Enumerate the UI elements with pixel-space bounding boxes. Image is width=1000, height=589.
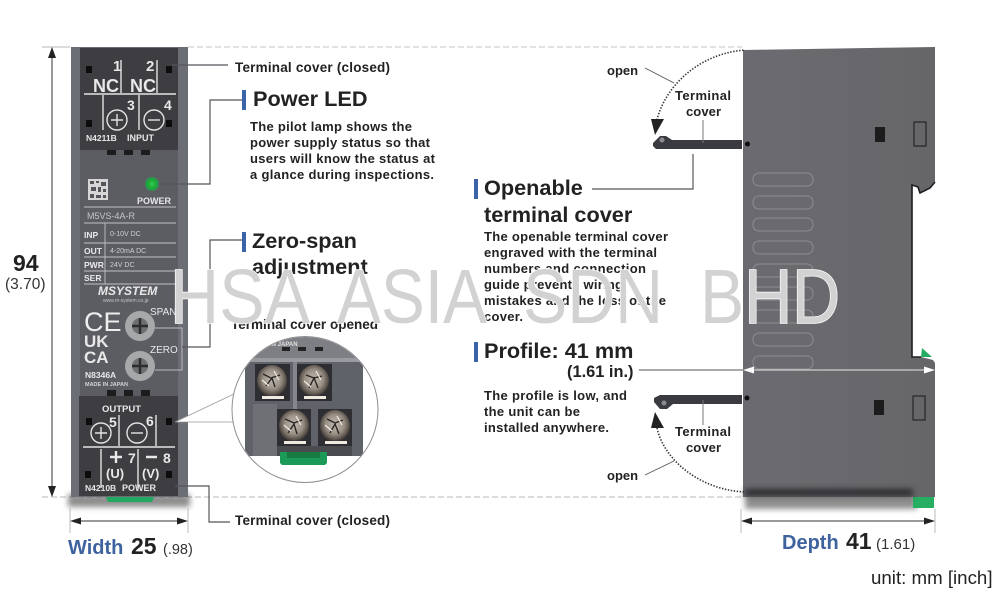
label: terminal cover closed bottom: Terminal cover (closed) <box>235 513 390 528</box>
heading: Profile 41 mm <box>474 338 743 381</box>
heading: Zero-span adjustment: adjustment <box>252 254 368 279</box>
device housing <box>71 47 188 497</box>
lower terminal cover <box>79 390 178 496</box>
heading: Zero-span adjustment <box>242 228 368 279</box>
width label <box>68 533 193 559</box>
text: Power LED description <box>250 119 436 182</box>
watermark: BHD <box>700 254 840 340</box>
depth dimension <box>741 509 935 533</box>
heading: Openable terminal cover <box>474 154 693 227</box>
text: Power LED description: The pilot lamp shows the <box>250 119 412 134</box>
lower terminal cover: POWER <box>122 483 157 493</box>
inset: opened terminals magnifier: IN JAPAN <box>270 342 298 348</box>
nameplate table: OUT <box>84 246 103 256</box>
upper terminal cover: NC <box>93 76 119 96</box>
heading: Openable terminal cover: terminal cover <box>484 202 633 227</box>
model text: MADE IN JAPAN <box>85 382 128 388</box>
span and zero dials: SPAN <box>150 307 176 318</box>
upper terminal cover: 3 <box>127 97 135 113</box>
text: openable cover description: The openable terminal cover <box>484 229 668 244</box>
upper terminal cover: 2 <box>146 58 154 75</box>
text: profile description: The profile is low, and <box>484 388 627 403</box>
nameplate table: SER <box>84 273 101 283</box>
green clip bottom <box>913 494 934 508</box>
lower terminal cover: 8 <box>163 450 171 466</box>
label: open top: open <box>607 63 638 78</box>
CE UKCA marks <box>84 307 122 367</box>
label: terminal cover upper: cover <box>686 104 721 119</box>
shadow under front device <box>68 494 190 507</box>
inset: opened terminals magnifier <box>175 335 385 482</box>
green clip <box>106 497 154 502</box>
upper terminal cover: 1 <box>113 58 121 75</box>
lower terminal cover: 6 <box>146 413 154 429</box>
depth label: 41 <box>846 528 872 554</box>
upper side cover <box>653 136 742 149</box>
label: open bottom <box>607 461 674 483</box>
lower terminal cover: OUTPUT <box>102 404 141 415</box>
lower terminal cover: 7 <box>128 450 136 466</box>
label: terminal cover upper: Terminal <box>675 88 731 103</box>
label: open bottom: open <box>607 468 638 483</box>
nameplate table: PWR <box>84 260 104 270</box>
nameplate table: 24V DC <box>110 262 135 269</box>
lower side cover <box>654 395 742 409</box>
depth label: (1.61) <box>876 536 915 553</box>
QR code <box>88 179 108 200</box>
upper terminal cover: N4211B <box>86 133 117 143</box>
span and zero dials: ZERO <box>150 345 178 356</box>
lower terminal cover: (V) <box>142 466 159 481</box>
power LED <box>145 177 159 191</box>
span and zero dials <box>125 307 182 381</box>
depth arrow on device <box>743 366 935 374</box>
green latch <box>921 348 932 357</box>
label: open top <box>607 63 674 83</box>
heading: Openable terminal cover: Openable <box>484 175 583 200</box>
depth label: Depth <box>782 532 839 554</box>
nameplate table: 4-20mA DC <box>110 248 146 255</box>
text: openable cover description <box>484 229 668 324</box>
upper terminal cover: 4 <box>164 97 172 113</box>
height dimension label: 94 <box>13 250 39 276</box>
lower terminal cover: 5 <box>109 414 117 430</box>
lower terminal cover: (U) <box>106 466 124 481</box>
text: openable cover description: numbers and connection <box>484 261 646 276</box>
text: profile description <box>484 388 627 435</box>
width label: 25 <box>131 533 157 559</box>
MSYSTEM logo <box>98 284 158 304</box>
side housing <box>743 47 935 497</box>
width label: (.98) <box>163 542 193 558</box>
MSYSTEM logo: MSYSTEM <box>98 284 158 298</box>
height dimension label: (3.70) <box>5 276 46 293</box>
watermark <box>170 254 840 340</box>
width dimension <box>70 508 188 533</box>
upper terminal cover <box>80 48 178 155</box>
label: terminal cover closed top: Terminal cover (closed) <box>235 60 390 75</box>
front view device: POWER <box>137 196 172 206</box>
nameplate table: 0-10V DC <box>110 231 141 238</box>
label: terminal cover lower <box>675 400 731 455</box>
callout lines: front view <box>158 65 243 522</box>
label: terminal cover upper <box>675 88 731 143</box>
dashed extension lines <box>42 47 742 497</box>
MSYSTEM logo: www.m-system.co.jp <box>103 298 149 304</box>
nameplate table: M5VS-4A-R <box>87 211 136 221</box>
nameplate table: INP <box>84 230 98 240</box>
depth label <box>782 528 915 554</box>
heading: Profile 41 mm: (1.61 in.) <box>567 363 634 381</box>
text: Power LED description: a glance during inspections. <box>250 167 434 182</box>
nameplate table <box>84 207 176 284</box>
ventilation slots <box>753 173 813 369</box>
CE UKCA marks: CA <box>84 348 109 367</box>
label: terminal cover lower: cover <box>686 440 721 455</box>
text: openable cover description: mistakes and the loss of the <box>484 293 666 308</box>
text: Power LED description: users will know the status at <box>250 151 436 166</box>
text: profile description: the unit can be <box>484 404 580 419</box>
heading: Power LED: Power LED <box>253 86 367 111</box>
height dimension arrow <box>48 47 56 497</box>
label: terminal cover opened: Terminal cover opened <box>231 317 378 332</box>
unit note: unit: mm [inch] <box>871 567 993 588</box>
model text: N8346A <box>85 370 116 380</box>
watermark: ASIA <box>337 254 488 340</box>
CE UKCA marks: CE <box>84 307 122 337</box>
side view device <box>743 47 935 508</box>
shadow under side device <box>745 494 917 509</box>
text: openable cover description: cover. <box>484 309 523 324</box>
watermark: HSA <box>170 254 311 340</box>
upper open arc arrow <box>651 50 745 135</box>
text: profile description: installed anywhere. <box>484 420 609 435</box>
watermark: SDN <box>523 254 663 340</box>
upper terminal cover: INPUT <box>127 133 155 143</box>
latch details <box>744 122 926 420</box>
width label: Width <box>68 537 123 559</box>
CE UKCA marks: UK <box>84 332 109 351</box>
heading: Zero-span adjustment: Zero-span <box>252 228 357 253</box>
lower terminal cover: N4210B <box>85 483 116 493</box>
lower open arc arrow <box>651 412 745 492</box>
text: openable cover description: guide prevents wiring <box>484 277 623 292</box>
front view device <box>71 47 188 502</box>
text: Power LED description: power supply status so that <box>250 135 431 150</box>
height dimension label <box>5 250 46 293</box>
text: openable cover description: engraved with the terminal <box>484 245 657 260</box>
heading: Profile 41 mm: Profile: 41 mm <box>484 338 633 363</box>
upper terminal cover: NC <box>130 76 156 96</box>
model text <box>85 370 128 388</box>
label: terminal cover lower: Terminal <box>675 424 731 439</box>
